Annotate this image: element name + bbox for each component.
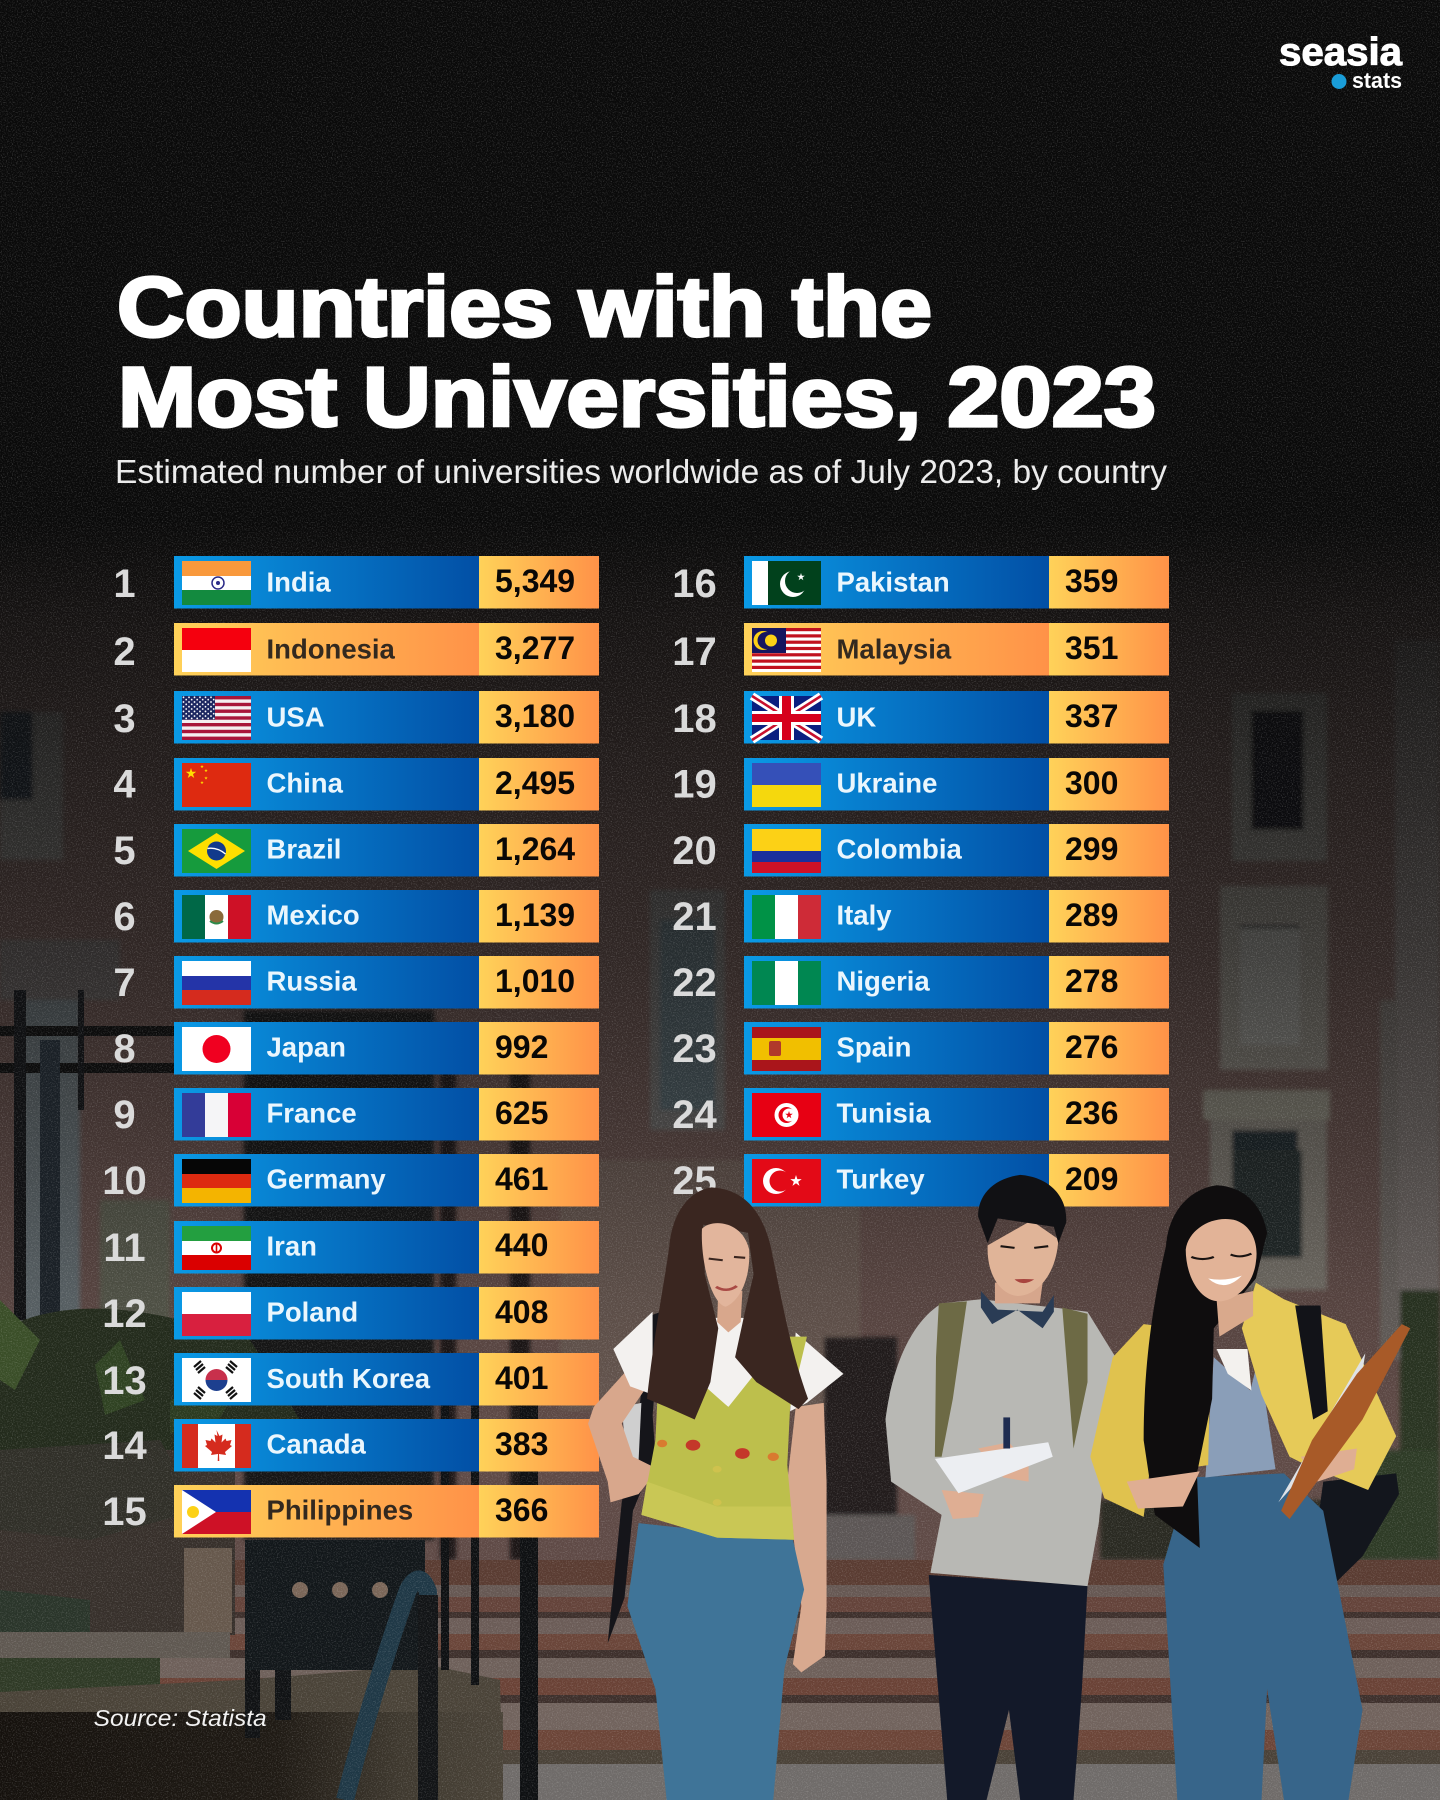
row: Turkey: 209: [1065, 1161, 1118, 1197]
title: [117, 260, 1156, 444]
flag: France: [182, 1093, 251, 1137]
row: Tunisia: 24: [672, 1093, 717, 1137]
row: Ukraine: 19: [672, 762, 717, 806]
row: Brazil: Brazil: [266, 834, 341, 864]
flag: Germany: [182, 1159, 251, 1203]
flag: Mexico: [182, 895, 251, 939]
row: Iran: Iran: [266, 1230, 317, 1262]
row: Canada: 14: [102, 1424, 147, 1468]
row: UK: UK: [836, 702, 876, 732]
flag: Turkey: [752, 1159, 821, 1203]
row: Russia: Russia: [266, 966, 357, 996]
row: USA: 3,180: [495, 698, 575, 734]
row: Tunisia: Tunisia: [836, 1098, 931, 1128]
row: Turkey: 25: [672, 1159, 717, 1203]
flag: Malaysia: [752, 628, 821, 672]
row: Colombia: 20: [672, 829, 717, 873]
row: Philippines: 366: [495, 1492, 548, 1528]
row: UK: 337: [1065, 698, 1118, 734]
row: Spain: 23: [672, 1027, 717, 1071]
row: France: 9: [113, 1093, 136, 1137]
steps: [0, 1560, 1440, 1800]
flag: Italy: [752, 895, 821, 939]
flag: Japan: [182, 1027, 251, 1071]
row: China: 2,495: [495, 765, 575, 801]
row: China: 4: [113, 762, 136, 806]
flag: South Korea: [182, 1358, 251, 1402]
row: USA: [113, 691, 599, 744]
row: Turkey: [672, 1154, 1169, 1206]
row: Poland: 408: [495, 1294, 548, 1330]
row: Indonesia: 3,277: [495, 630, 575, 666]
row: USA: USA: [266, 702, 325, 732]
flag: Spain: [752, 1027, 821, 1071]
row: China: [113, 758, 599, 810]
flag: Ukraine: [752, 763, 821, 807]
row: Brazil: 1,264: [495, 831, 575, 867]
row: Iran: 11: [103, 1226, 146, 1270]
left fence and plants: [0, 990, 538, 1800]
row: Iran: [103, 1221, 599, 1274]
flag: Pakistan: [752, 561, 821, 605]
row: China: China: [266, 768, 344, 798]
flag: Brazil: [182, 829, 251, 873]
row: Italy: 21: [672, 895, 717, 939]
source: Source: Statista: [94, 1705, 267, 1731]
row: India: India: [266, 566, 331, 598]
row: Malaysia: 351: [1065, 630, 1118, 666]
row: Brazil: 5: [113, 829, 136, 873]
row: Mexico: Mexico: [266, 900, 360, 930]
row: Japan: 992: [495, 1029, 548, 1065]
title: Most Universities, 2023: [118, 350, 1156, 444]
flag: Russia: [182, 961, 251, 1005]
row: Ukraine: 300: [1065, 765, 1118, 801]
row: Philippines: 15: [102, 1490, 147, 1534]
row: Pakistan: [672, 556, 1169, 608]
row: France: [113, 1088, 599, 1140]
row: Italy: 289: [1065, 897, 1118, 933]
row: South Korea: South Korea: [266, 1363, 431, 1394]
subtitle: Estimated number of universities worldwide as of July 2023, by country: [115, 454, 1167, 491]
row: Japan: 8: [113, 1027, 136, 1071]
row: Poland: Poland: [266, 1296, 358, 1328]
flag: Tunisia: [752, 1093, 821, 1137]
flag: Indonesia: [182, 628, 251, 672]
flag: Nigeria: [752, 961, 821, 1005]
flag: India: [182, 561, 251, 605]
row: Tunisia: [672, 1088, 1169, 1140]
row: Malaysia: 17: [672, 630, 717, 674]
row: Germany: 461: [495, 1161, 548, 1197]
logo: seasia stats: [1279, 31, 1402, 93]
row: Germany: Germany: [266, 1164, 386, 1194]
row: Brazil: [113, 824, 599, 876]
flag: USA: [182, 696, 251, 740]
photo: three students: [588, 1175, 1410, 1800]
row: Mexico: 6: [113, 895, 136, 939]
student: girl with yellow jacket: [1090, 1185, 1410, 1800]
row: USA: 3: [113, 697, 136, 741]
flag: China: [182, 763, 251, 807]
left ranking column: [102, 556, 599, 1538]
row: India: 5,349: [495, 563, 575, 599]
row: Russia: 7: [113, 961, 136, 1005]
row: Colombia: 299: [1065, 831, 1118, 867]
row: Malaysia: Malaysia: [836, 634, 952, 664]
flag: Poland: [182, 1292, 251, 1336]
row: Colombia: [672, 824, 1169, 876]
row: Pakistan: 16: [672, 562, 717, 606]
row: South Korea: [102, 1353, 599, 1406]
row: Canada: 383: [495, 1426, 548, 1462]
row: Colombia: Colombia: [836, 834, 962, 864]
student: girl with vest: [588, 1187, 843, 1800]
row: Nigeria: [672, 956, 1169, 1008]
flag: Iran: [182, 1226, 251, 1270]
row: Spain: [672, 1022, 1169, 1074]
row: Spain: Spain: [836, 1032, 911, 1062]
flag: Colombia: [752, 829, 821, 873]
row: France: 625: [495, 1095, 548, 1131]
row: Indonesia: [113, 623, 599, 676]
flag: Canada: [182, 1424, 251, 1468]
row: Canada: [102, 1419, 599, 1472]
right ranking column: [672, 556, 1169, 1206]
row: India: [113, 556, 599, 608]
logo: seasia stats: stats: [1352, 68, 1402, 93]
row: India: 1: [113, 562, 136, 606]
row: UK: [672, 691, 1169, 744]
row: South Korea: 401: [495, 1360, 548, 1396]
row: Mexico: 1,139: [495, 897, 575, 933]
row: Nigeria: 278: [1065, 963, 1118, 999]
row: Italy: [672, 890, 1169, 942]
row: Indonesia: Indonesia: [266, 634, 396, 664]
row: Pakistan: 359: [1065, 563, 1118, 599]
row: Russia: [113, 956, 599, 1008]
row: Pakistan: Pakistan: [836, 566, 950, 598]
row: Malaysia: [672, 623, 1169, 676]
row: Nigeria: 22: [672, 961, 717, 1005]
row: Philippines: [102, 1485, 599, 1538]
row: Russia: 1,010: [495, 963, 575, 999]
logo: seasia stats: seasia: [1279, 31, 1402, 74]
row: Japan: Japan: [266, 1032, 346, 1062]
title: Countries with the: [117, 260, 932, 354]
flag: Philippines: [182, 1490, 251, 1534]
row: Tunisia: 236: [1065, 1095, 1118, 1131]
row: Ukraine: [672, 758, 1169, 810]
row: Canada: Canada: [266, 1428, 367, 1460]
row: Philippines: Philippines: [266, 1494, 413, 1526]
row: Turkey: Turkey: [836, 1164, 925, 1194]
row: Iran: 440: [495, 1227, 548, 1263]
row: Nigeria: Nigeria: [836, 966, 930, 996]
row: Italy: Italy: [836, 900, 892, 930]
row: Mexico: [113, 890, 599, 942]
row: Indonesia: 2: [113, 630, 136, 674]
row: Germany: 10: [102, 1159, 147, 1203]
row: Spain: 276: [1065, 1029, 1118, 1065]
row: South Korea: 13: [102, 1359, 147, 1403]
row: Poland: 12: [102, 1292, 147, 1336]
row: Germany: [102, 1154, 599, 1206]
row: Ukraine: Ukraine: [836, 768, 937, 798]
row: Japan: [113, 1022, 599, 1074]
flag: UK: [752, 696, 821, 740]
row: Poland: [102, 1287, 599, 1340]
row: France: France: [266, 1098, 357, 1128]
row: UK: 18: [672, 697, 717, 741]
student: boy with papers: [885, 1175, 1116, 1800]
